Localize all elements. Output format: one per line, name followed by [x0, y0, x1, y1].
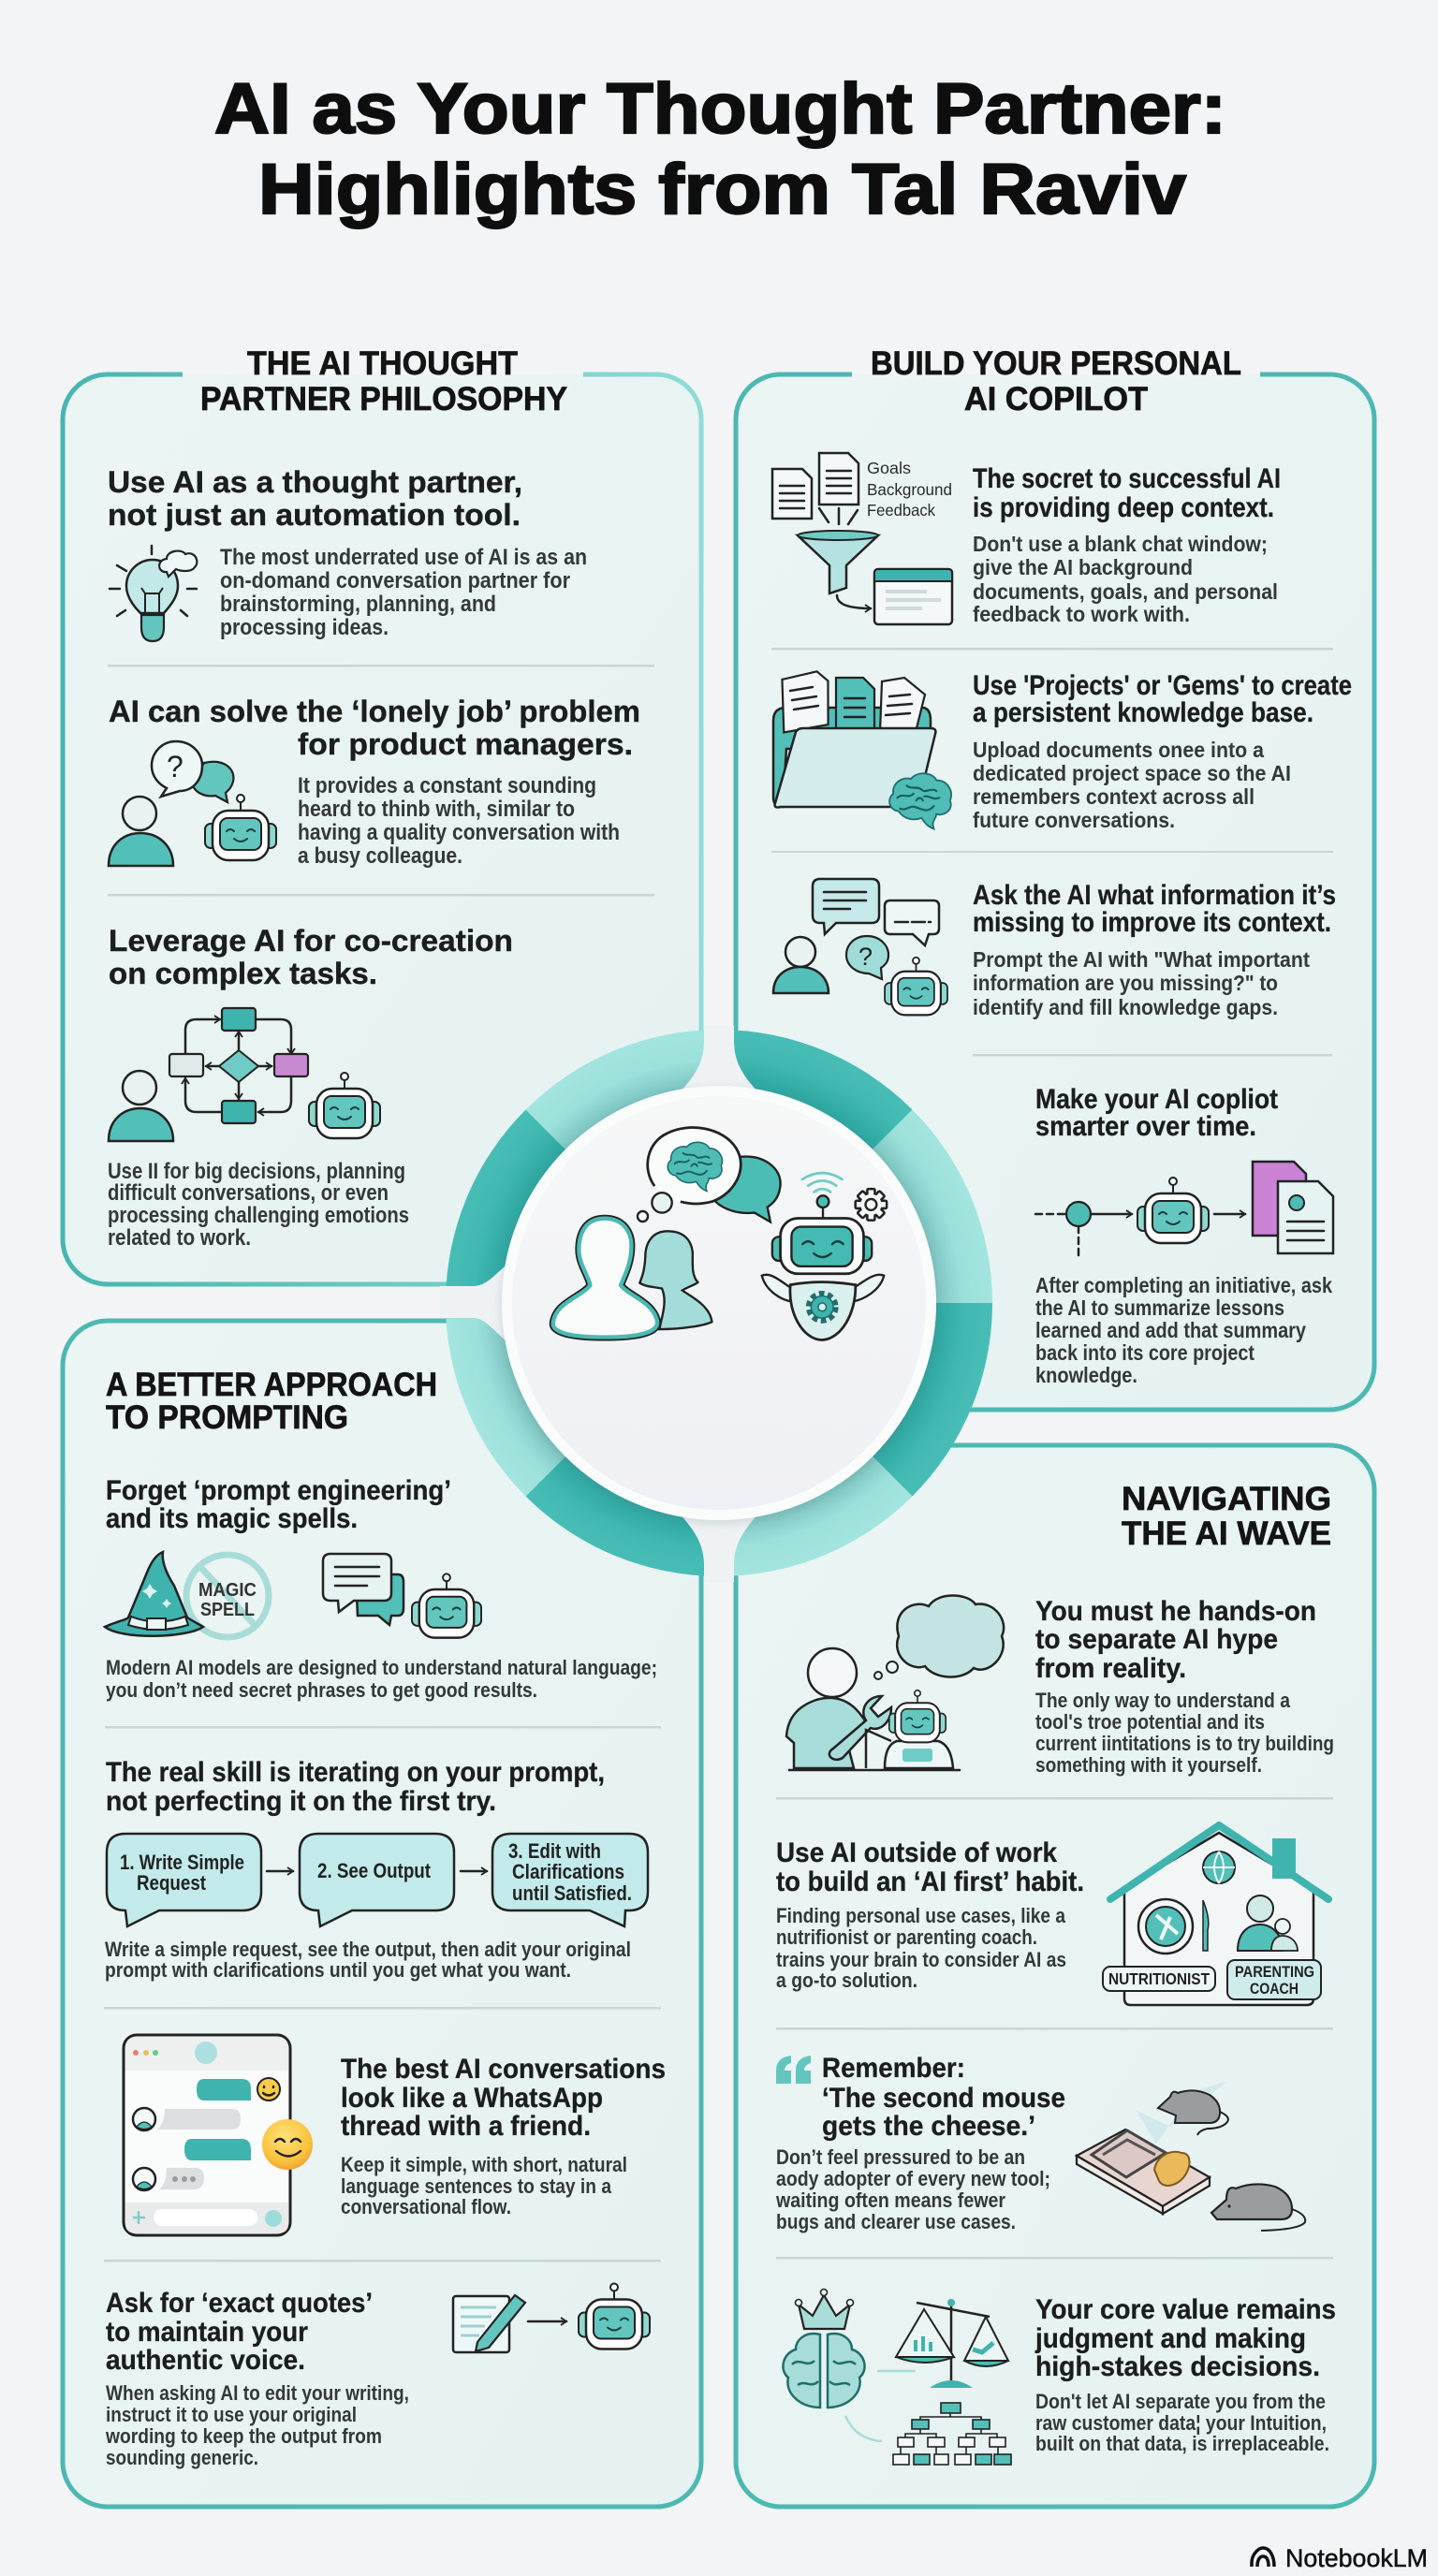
item heading: deep context: The socret to successful AI: [973, 463, 1281, 494]
item heading: deep context: is providing deep context.: [973, 492, 1274, 523]
label: nutritionist: [1103, 1967, 1215, 1991]
text: lonely job body: having a quality conversation with: [298, 820, 620, 845]
text: deep context body: Don't use a blank chat window;: [973, 532, 1268, 556]
chart: three-step iteration flow: [107, 1834, 648, 1926]
icon: wizard hat and crossed-out magic spell: SPELL: [200, 1600, 255, 1620]
text: missing information body: information are you missing?" to: [973, 971, 1278, 995]
icon: note with pencil to robot: [453, 2284, 650, 2352]
text: magic spells body: Modern AI models are designed to understand natural language;: [106, 1656, 657, 1679]
icon: documents into funnel and window: [772, 453, 952, 624]
title: AI as Your Thought Partner:: [214, 69, 1226, 149]
text: thought partner body: [220, 545, 587, 640]
text: lonely job body: a busy colleague.: [298, 843, 462, 869]
panel: navigating the AI wave: [736, 1445, 1374, 2507]
item heading: missing information: Ask the AI what information it’s: [973, 880, 1336, 911]
panel heading: NAVIGATING: [1122, 1481, 1331, 1517]
item heading: iterating: not perfecting it on the first try.: [106, 1786, 496, 1817]
text: exact quotes body: instruct it to use your original: [106, 2403, 357, 2426]
item heading: missing information: missing to improve its context.: [973, 907, 1331, 938]
label: parenting coach: COACH: [1250, 1980, 1299, 1998]
icon: timeline to robot to documents: [1035, 1162, 1333, 1256]
item heading: iterating: The real skill is iterating on your prompt,: [106, 1757, 605, 1788]
item heading: exact quotes: [106, 2288, 373, 2376]
item heading: persistent knowledge base: Use 'Projects' or 'Gems' to create: [973, 670, 1352, 701]
item heading: WhatsApp thread: [341, 2054, 666, 2142]
item heading: hands-on: [1035, 1596, 1316, 1684]
text: AI first body: [776, 1904, 1066, 1992]
item heading: exact quotes: Ask for ‘exact quotes’: [106, 2288, 373, 2319]
panel heading: THE AI WAVE: [1122, 1515, 1331, 1552]
icon: crowned brain, scales and hierarchy: [783, 2290, 1011, 2465]
text: smarter over time body: knowledge.: [1035, 1363, 1137, 1387]
text: iterating body: prompt with clarifications until you get what you want.: [105, 1958, 571, 1982]
icon: person and robot exchanging questions: [773, 879, 947, 1015]
item heading: core value: high-stakes decisions.: [1035, 2351, 1320, 2382]
panel heading: AI COPILOT: [964, 381, 1148, 417]
text: exact quotes body: When asking AI to edit your writing,: [106, 2381, 409, 2405]
item heading: co-creation: [109, 924, 513, 990]
text: co-creation body: Use II for big decisions, planning: [108, 1159, 405, 1184]
thought bubble with brain: [638, 1128, 741, 1222]
text: hands-on body: [1035, 1689, 1334, 1777]
text: second mouse body: Don’t feel pressured to be an: [776, 2145, 1025, 2169]
panel heading: A BETTER APPROACH: [106, 1367, 437, 1403]
text: exact quotes body: [105, 2381, 409, 2469]
panel heading: [1122, 1481, 1331, 1552]
text: deep context body: give the AI background: [973, 555, 1193, 579]
item heading: thought partner: [108, 465, 522, 532]
text: smarter over time body: learned and add that summary: [1035, 1318, 1306, 1342]
text: smarter over time body: the AI to summarize lessons: [1035, 1295, 1284, 1320]
text: second mouse body: [775, 2145, 1050, 2233]
icon: person building robot with thought cloud: [786, 1595, 1004, 1770]
person outline inner teal line: [550, 1217, 659, 1339]
panel heading: BUILD YOUR PERSONAL: [871, 345, 1241, 382]
text: magic spells body: you don’t need secret phrases to get good results.: [106, 1678, 537, 1702]
org chart: [893, 2403, 1011, 2465]
item heading: smarter over time: Make your AI copliot: [1035, 1084, 1278, 1115]
step 3 bubble: until Satisfied.: [512, 1881, 632, 1905]
item heading: core value: Your core value remains: [1035, 2294, 1336, 2325]
text: thought partner body: processing ideas.: [220, 615, 389, 640]
item heading: core value: [1034, 2294, 1336, 2382]
text: exact quotes body: wording to keep the output from: [105, 2424, 382, 2448]
text: magic spells body: [106, 1656, 657, 1702]
item heading: thought partner: Use AI as a thought partner,: [108, 465, 522, 499]
item heading: persistent knowledge base: a persistent knowledge base.: [973, 697, 1313, 728]
panel: build your personal AI copilot: [736, 345, 1374, 1410]
text: missing information body: [973, 947, 1310, 1019]
step 1 bubble: Request: [137, 1871, 207, 1895]
item heading: WhatsApp thread: look like a WhatsApp: [341, 2083, 603, 2114]
text: AI first body: nutrifionist or parenting coach.: [776, 1925, 1037, 1949]
text: co-creation body: processing challenging emotions: [108, 1203, 409, 1228]
text: iterating body: [105, 1938, 631, 1982]
text: iterating body: Write a simple request, see the output, then adit your original: [105, 1938, 631, 1961]
step 1 bubble: 1. Write Simple: [120, 1851, 244, 1874]
text: second mouse body: bugs and clearer use cases.: [776, 2210, 1016, 2233]
icon: lightbulb with speech cloud: [110, 546, 197, 641]
icon: wizard hat and crossed-out magic spell: MAGIC: [198, 1580, 257, 1601]
teal speech bubble: [715, 1157, 781, 1222]
item heading: second mouse: Remember:: [822, 2053, 965, 2084]
item heading: iterating: [106, 1757, 605, 1817]
item heading: persistent knowledge base: [973, 670, 1352, 728]
text: thought partner body: on-domand conversation partner for: [220, 568, 570, 593]
text: smarter over time body: [1035, 1273, 1332, 1387]
panel heading: PARTNER PHILOSOPHY: [200, 381, 567, 417]
text: smarter over time body: After completing an initiative, ask: [1035, 1273, 1332, 1297]
step 2 bubble: 2. See Output: [317, 1859, 432, 1882]
text: co-creation body: related to work.: [108, 1225, 251, 1251]
text: knowledge base body: Upload documents onee into a: [973, 738, 1264, 762]
text: lonely job body: heard to thinb with, similar to: [298, 797, 575, 822]
label: input types: Feedback: [867, 501, 935, 520]
text: AI first body: Finding personal use cases, like a: [776, 1904, 1066, 1927]
item heading: lonely job: [109, 695, 640, 761]
item heading: co-creation: on complex tasks.: [109, 957, 377, 990]
panel heading: [106, 1367, 437, 1436]
text: knowledge base body: [973, 738, 1291, 832]
item heading: exact quotes: to maintain your: [106, 2317, 308, 2348]
text: hands-on body: current iintitations is to try building: [1035, 1732, 1334, 1755]
title: Highlights from Tal Raviv: [258, 150, 1186, 229]
small gear: [856, 1189, 887, 1220]
item heading: second mouse: ‘The second mouse: [822, 2083, 1065, 2114]
icon: project folder with brain: [773, 670, 951, 829]
item heading: WhatsApp thread: thread with a friend.: [341, 2111, 591, 2142]
item heading: deep context: [973, 463, 1281, 523]
text: lonely job body: [298, 773, 620, 869]
item heading: core value: judgment and making: [1034, 2323, 1306, 2354]
text: missing information body: identify and fill knowledge gaps.: [973, 995, 1278, 1019]
text: co-creation body: [108, 1159, 409, 1251]
item heading: hands-on: You must he hands-on: [1035, 1596, 1316, 1627]
arrow 1 to 2: [267, 1870, 293, 1872]
step 1 bubble: [107, 1834, 261, 1926]
item heading: exact quotes: authentic voice.: [106, 2345, 305, 2376]
title: [214, 69, 1226, 229]
icon: house with nutritionist and parenting coach: [1103, 1825, 1328, 2005]
icon: phone chat thread with emoji: [124, 2035, 313, 2235]
item heading: magic spells: Forget ‘prompt engineering’: [106, 1475, 451, 1506]
text: hands-on body: tool's troe potential and its: [1035, 1710, 1265, 1734]
label: input types: [867, 459, 952, 520]
text: hands-on body: The only way to understand a: [1035, 1689, 1291, 1712]
panel: the AI thought partner philosophy: [63, 345, 701, 1284]
text: WhatsApp body: [341, 2153, 627, 2218]
panel heading: [871, 345, 1241, 417]
text: thought partner body: The most underrated use of AI is as an: [220, 545, 587, 570]
text: lonely job body: It provides a constant sounding: [298, 773, 596, 798]
step 3 bubble: Clarifications: [512, 1860, 624, 1883]
icon: wizard hat and crossed-out magic spell: [105, 1552, 269, 1637]
step 2 bubble: [300, 1834, 454, 1926]
text: knowledge base body: future conversations.: [973, 808, 1175, 832]
text: core value body: [1035, 2390, 1329, 2455]
text: thought partner body: brainstorming, planning, and: [220, 592, 496, 617]
icon: quotation mark: [776, 2056, 811, 2084]
text: core value body: built on that data, is irreplaceable.: [1035, 2432, 1329, 2455]
text: knowledge base body: dedicated project space so the AI: [973, 761, 1291, 785]
panel heading: THE AI THOUGHT: [247, 345, 518, 382]
icon: person and robot exchanging questions: ?: [858, 943, 873, 971]
text: second mouse body: waiting often means fewer: [775, 2188, 1005, 2212]
person outline: [550, 1217, 659, 1339]
mouse one: [1158, 2090, 1228, 2135]
text: deep context body: feedback to work with.: [973, 602, 1190, 626]
item heading: AI first habit: to build an ‘AI first’ habit.: [776, 1866, 1084, 1897]
central robot: [762, 1173, 887, 1340]
text: AI first body: trains your brain to consider AI as: [776, 1948, 1066, 1971]
central white disc: [502, 1086, 936, 1520]
label: parenting coach: [1227, 1960, 1321, 1999]
panel heading: TO PROMPTING: [106, 1399, 348, 1436]
item heading: lonely job: AI can solve the ‘lonely job’ problem: [109, 695, 640, 728]
text: exact quotes body: sounding generic.: [106, 2446, 258, 2469]
text: WhatsApp body: Keep it simple, with short, natural: [341, 2153, 627, 2176]
text: smarter over time body: back into its core project: [1035, 1340, 1255, 1365]
mouse two: [1211, 2184, 1305, 2231]
item heading: second mouse: gets the cheese.’: [822, 2111, 1035, 2142]
icon: co-creation flow diagram: [109, 1008, 380, 1141]
item heading: smarter over time: smarter over time.: [1035, 1111, 1256, 1142]
item heading: AI first habit: Use AI outside of work: [776, 1837, 1057, 1868]
text: AI first body: a go-to solution.: [776, 1969, 917, 1992]
text: deep context body: documents, goals, and personal: [973, 579, 1278, 604]
item heading: lonely job: for product managers.: [298, 727, 633, 761]
item heading: missing information: [973, 880, 1336, 938]
text: co-creation body: difficult conversations, or even: [108, 1180, 389, 1206]
item heading: hands-on: from reality.: [1035, 1653, 1186, 1684]
text: WhatsApp body: language sentences to stay in a: [341, 2174, 612, 2198]
text: core value body: raw customer data¦ your Intuition,: [1035, 2411, 1327, 2435]
icon: two people thinking with brain bubble and robot: [550, 1128, 887, 1340]
text: WhatsApp body: conversational flow.: [341, 2195, 511, 2218]
item heading: hands-on: to separate AI hype: [1035, 1624, 1278, 1655]
text: hands-on body: something with it yourself.: [1035, 1753, 1262, 1777]
text: missing information body: Prompt the AI with "What important: [973, 947, 1310, 972]
item heading: magic spells: and its magic spells.: [106, 1503, 358, 1534]
item heading: second mouse: [822, 2053, 1065, 2142]
label: input types: Background: [867, 480, 952, 499]
icon: person and robot talking: [109, 741, 276, 866]
central ring with segmented bands: [440, 1026, 992, 1582]
label: parenting coach: PARENTING: [1235, 1963, 1314, 1981]
item heading: thought partner: not just an automation tool.: [108, 498, 521, 532]
icon: person and robot talking: ?: [167, 750, 183, 783]
label: input types: Goals: [867, 459, 911, 477]
text: second mouse body: aody adopter of every new tool;: [776, 2167, 1050, 2190]
panel heading: [200, 345, 567, 417]
icon: natural conversation with robot: [323, 1554, 481, 1638]
item heading: co-creation: Leverage AI for co-creation: [109, 924, 513, 958]
arrow 2 to 3: [461, 1870, 487, 1872]
second person silhouette: [639, 1231, 712, 1329]
label: nutritionist: NUTRITIONIST: [1108, 1969, 1210, 1988]
NotebookLM logo and wordmark: NotebookLM: [1285, 2544, 1428, 2572]
text: knowledge base body: remembers context across all: [973, 784, 1255, 809]
item heading: smarter over time: [1035, 1084, 1278, 1142]
text: core value body: Don't let AI separate you from the: [1035, 2390, 1326, 2413]
item heading: magic spells: [106, 1475, 451, 1534]
item heading: WhatsApp thread: The best AI conversations: [341, 2054, 666, 2085]
panel: a better approach to prompting: [63, 1321, 701, 2507]
step 3 bubble: 3. Edit with: [508, 1839, 601, 1863]
item heading: AI first habit: [776, 1837, 1084, 1897]
step 3 bubble: [492, 1834, 648, 1926]
text: deep context body: [973, 532, 1278, 626]
icon: mousetrap with cheese and two mice: [1077, 2082, 1305, 2231]
